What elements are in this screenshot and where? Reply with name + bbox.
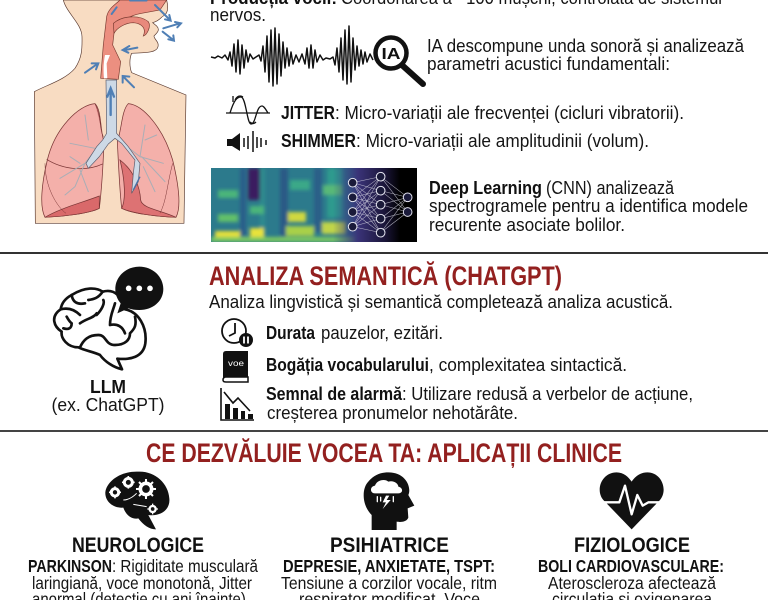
text: pauses: Durata <box>266 322 316 343</box>
text: vocabulary: , complexitatea sintactică. <box>429 354 627 375</box>
text: psychiatric conditions: Tensiune a corzilor vocale, ritm <box>281 573 497 593</box>
heading: psihiatrice: PSIHIATRICE <box>330 534 449 557</box>
text: physiological conditions: BOLI CARDIOVASCULARE: <box>538 556 724 576</box>
breath arrows <box>85 1 181 115</box>
text: shimmer: SHIMMER <box>281 130 356 151</box>
text: pauses: pauzelor, ezitări. <box>321 322 443 343</box>
text: psychiatric conditions <box>281 556 497 600</box>
illustration: respiratory system <box>34 0 186 223</box>
heading: semantic analysis: ANALIZA SEMANTICĂ (CHATGPT) <box>209 260 562 291</box>
text: alarm signal: : Utilizare redusă a verbelor de acțiune, <box>402 383 693 404</box>
text: voice production: nervos. <box>210 4 266 25</box>
text: jitter: JITTER <box>281 102 335 123</box>
bronchial tree <box>60 115 165 195</box>
text: deep learning: recurente asociate bolilor. <box>429 214 625 235</box>
icon: IA magnifier <box>376 38 423 84</box>
label: LLM <box>52 376 164 415</box>
text: alarm signal: creșterea pronumelor nehotărâte. <box>267 402 518 423</box>
text: deep learning: spectrogramele pentru a identifica modele <box>429 195 748 216</box>
text: alarm signal: Semnal de alarmă <box>266 383 403 404</box>
icon: IA magnifier: IA <box>382 46 401 63</box>
text: neurological conditions: PARKINSON <box>28 556 112 576</box>
icon: vocabulary book: voe <box>228 359 245 368</box>
text: AI analysis intro: IA descompune unda sonoră și analizează <box>427 35 745 56</box>
text: neurological conditions <box>28 556 258 600</box>
text: alarm signal <box>266 383 693 423</box>
text: vocabulary: Bogăția vocabularului <box>266 354 429 375</box>
text: shimmer: : Micro-variații ale amplitudinii (volum). <box>356 130 649 151</box>
label: LLM: LLM <box>90 376 126 397</box>
icon: clock with pause <box>222 319 253 347</box>
icon: head with storm cloud <box>364 472 414 530</box>
text: neurological conditions: : Rigiditate musculară <box>112 556 258 576</box>
trachea <box>86 80 140 193</box>
icon: LLM brain with speech bubble <box>54 267 163 369</box>
heading: neurologice: NEUROLOGICE <box>72 534 204 557</box>
text: voice production <box>210 0 722 25</box>
icon: vocabulary book <box>223 351 248 382</box>
text: semantic intro: Analiza lingvistică și semantică completează analiza acustică. <box>209 291 673 312</box>
text: psychiatric conditions: DEPRESIE, ANXIETATE, TSPT: <box>283 556 495 576</box>
icon: sound wave <box>211 26 373 86</box>
icon: jitter sine wave <box>226 96 270 124</box>
text: pauses <box>266 322 443 343</box>
text: vocabulary <box>266 354 627 375</box>
body silhouette <box>34 0 186 223</box>
heading: fiziologice: FIZIOLOGICE <box>574 534 690 557</box>
text: deep learning: Deep Learning <box>429 177 542 198</box>
text: physiological conditions <box>538 556 724 600</box>
spectrogram with neural network <box>211 168 417 242</box>
icon: declining bar chart <box>221 388 254 420</box>
icon: heart with pulse <box>598 472 665 529</box>
heading: clinical applications: CE DEZVĂLUIE VOCEA TA: APLICAȚII CLINICE <box>146 437 622 468</box>
text: AI analysis intro <box>427 35 745 74</box>
icon: shimmer speaker <box>227 131 266 152</box>
icon: brain with gears <box>105 472 169 529</box>
text: jitter: : Micro-variații ale frecvenței (cicluri vibratorii). <box>335 102 684 123</box>
label: LLM: (ex. ChatGPT) <box>52 394 164 415</box>
text: neurological conditions: laringiană, voce monotonă, Jitter <box>32 573 252 593</box>
lungs <box>42 104 179 217</box>
text: deep learning <box>429 177 748 235</box>
nasal and throat passage <box>101 0 167 79</box>
text: physiological conditions: Ateroscleroza afectează <box>548 573 716 593</box>
text: AI analysis intro: parametri acustici fundamentali: <box>427 53 670 74</box>
text: deep learning: (CNN) analizează <box>546 177 675 198</box>
